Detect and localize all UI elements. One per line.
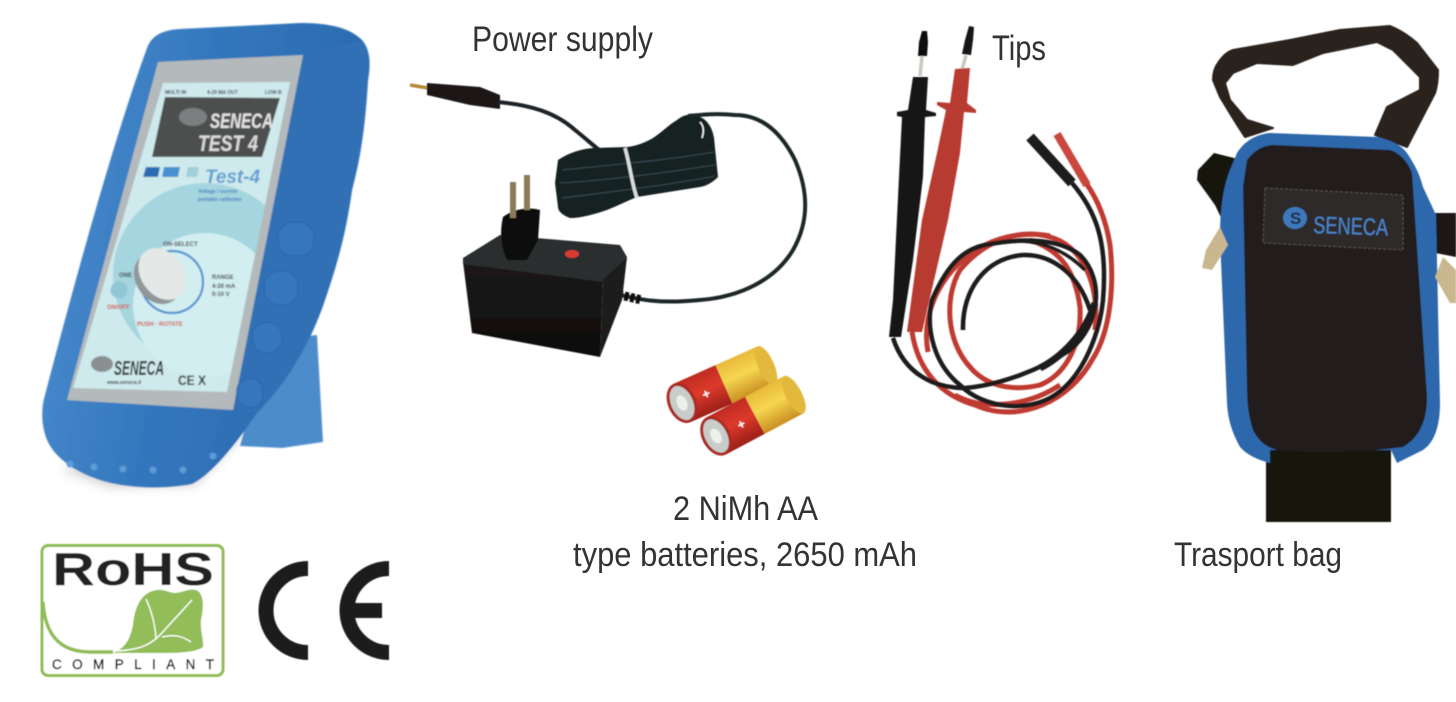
panel Seneca logo: SENECA (114, 358, 164, 380)
panel red labels: ON/OFF (107, 305, 130, 311)
black cable end (1030, 137, 1072, 183)
COMPLIANT wordmark: COMPLIANT (52, 657, 214, 672)
label: batteries (573, 490, 917, 574)
label: batteries: type batteries, 2650 mAh (573, 536, 917, 574)
coil gap (700, 122, 703, 138)
indicator LED (565, 250, 579, 258)
bag logo patch (1263, 188, 1403, 250)
panel control labels: ONE (119, 273, 132, 279)
letter C (266, 568, 308, 652)
coil tie (625, 148, 637, 198)
panel CE mark: CE X (178, 372, 207, 388)
letter E (347, 568, 389, 652)
panel top labels: MULTI IN (165, 90, 187, 96)
bag right strap (1420, 213, 1456, 257)
letter E middle bar (350, 603, 382, 618)
adapter front face (463, 262, 603, 357)
panel top labels: 4-20 MA OUT (207, 90, 238, 96)
device stand (240, 335, 323, 448)
panel subtitle (198, 189, 242, 203)
CE mark (266, 568, 389, 652)
panel red labels (107, 305, 183, 328)
reset button (110, 282, 128, 298)
bottom grip ridges (66, 452, 216, 474)
bag logo patch: SENECA (1313, 212, 1389, 242)
wall plug body (501, 208, 540, 260)
screen text SENECA: SENECA (210, 110, 273, 133)
panel Seneca logo (91, 356, 164, 386)
bag logo patch: S (1290, 209, 1301, 228)
device dark side edge (232, 40, 370, 412)
adapter top face (463, 235, 627, 282)
RoHS wordmark: RoHS (52, 543, 214, 595)
bag blue body (1220, 133, 1440, 463)
panel control labels (119, 242, 236, 298)
panel model name: Test-4 (205, 167, 260, 188)
black cable (893, 183, 1104, 406)
panel control labels: 0-10 V (212, 292, 230, 298)
label: Tips: Tips (992, 29, 1046, 68)
knob ring (141, 251, 203, 313)
red probe (907, 26, 976, 332)
wall plug pins (513, 175, 527, 218)
cable to adapter (612, 114, 805, 302)
test leads (889, 26, 1112, 412)
bag handle (1213, 26, 1438, 147)
panel red labels: PUSH - ROTATE (137, 322, 183, 328)
badge leaf (113, 589, 203, 653)
badge green curve (43, 602, 113, 652)
panel control labels: 4-20 mA (212, 284, 236, 290)
bag black front (1243, 145, 1427, 452)
right zipper pull (1435, 257, 1456, 303)
panel subtitle: Voltage / current (198, 189, 237, 195)
label: Power supply: Power supply (472, 20, 653, 59)
cable coil (555, 115, 718, 218)
device rubber housing (42, 23, 370, 487)
device shadow (60, 420, 250, 488)
panel Seneca logo: www.seneca.it (106, 380, 142, 386)
left zipper pull (1202, 227, 1228, 270)
battery front: + (734, 416, 748, 433)
device LCD screen (152, 97, 280, 157)
device pale front panel (73, 82, 290, 392)
panel control labels: RANGE (212, 275, 234, 281)
leaf veins (115, 599, 192, 651)
label: batteries: 2 NiMh AA (673, 490, 818, 528)
strain relief (607, 292, 642, 300)
side grip ridges (237, 222, 314, 408)
battery front (694, 372, 811, 461)
batteries (661, 343, 811, 461)
power supply adapter and cable (410, 83, 805, 357)
panel top labels: LOW B (265, 90, 282, 96)
knob (124, 239, 195, 313)
bag left strap (1197, 153, 1242, 228)
device: Seneca Test-4 calibrator (42, 23, 370, 488)
coil highlights (560, 152, 715, 198)
cable to coil (498, 102, 610, 158)
badge border (42, 546, 223, 676)
device panel swirl (112, 182, 266, 344)
transport bag (1197, 26, 1456, 522)
DC plug (410, 83, 500, 109)
battery rear (661, 343, 782, 428)
panel colour bars (143, 167, 199, 177)
RoHS compliant badge (42, 543, 223, 676)
adapter side face (600, 257, 627, 357)
screen logo (179, 108, 207, 126)
battery rear: + (700, 385, 713, 402)
panel subtitle: portable calibrator (198, 197, 242, 203)
panel control labels: ON-SELECT (163, 242, 198, 248)
red cable end (1057, 134, 1087, 185)
device grey bezel (67, 55, 303, 410)
bag bottom strap (1266, 440, 1391, 522)
black probe (889, 31, 936, 337)
panel top labels (165, 90, 282, 96)
label: Trasport bag: Trasport bag (1174, 536, 1342, 574)
screen text TEST 4: TEST 4 (198, 131, 258, 156)
red cable (912, 183, 1112, 412)
